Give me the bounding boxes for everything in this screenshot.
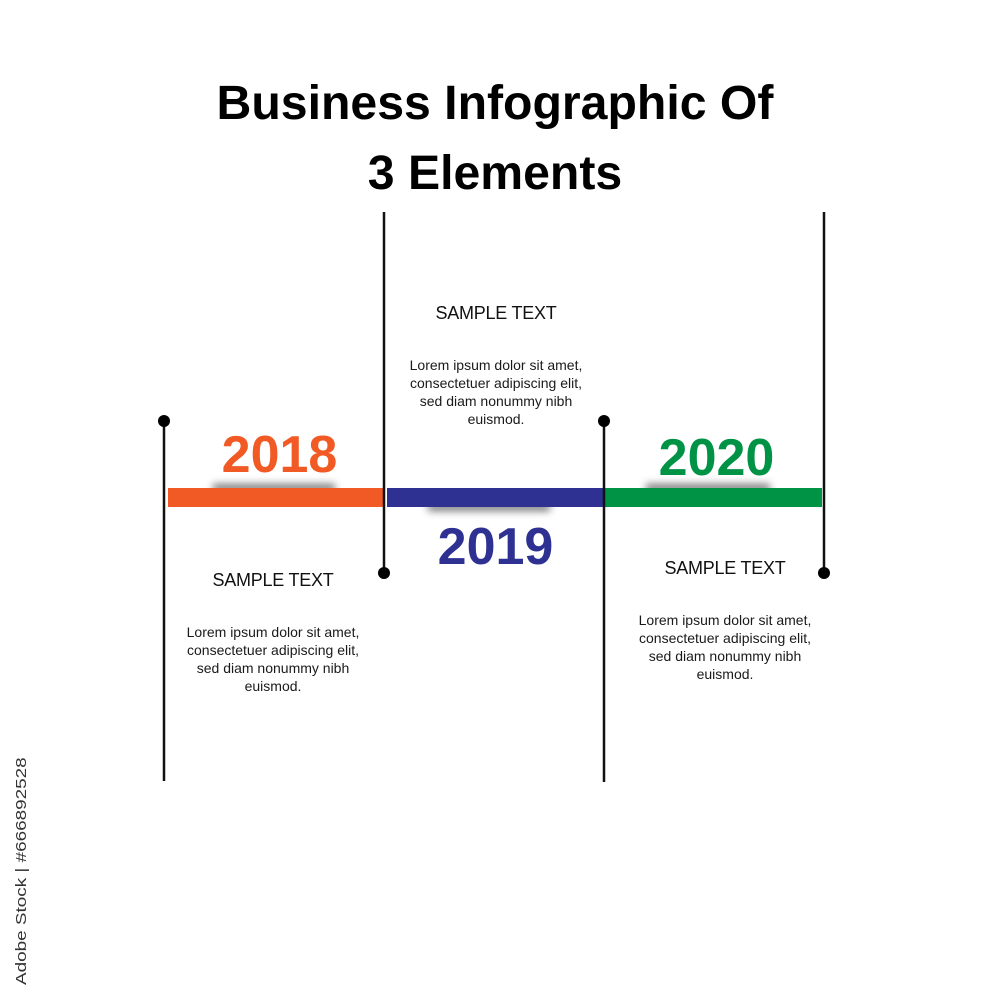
description: 2018: consectetuer adipiscing elit, [187, 642, 359, 658]
heading: 2020: SAMPLE TEXT [665, 558, 785, 578]
description: 2019: Lorem ipsum dolor sit amet, [410, 357, 582, 373]
shadow: 2019 bar [428, 503, 550, 511]
bar: 2020 [605, 488, 822, 507]
year: 2020: 2020 [659, 429, 774, 487]
description: 2018 [187, 624, 359, 694]
description: 2020: euismod. [697, 666, 753, 682]
description: 2019: sed diam nonummy nibh [420, 393, 572, 409]
description: 2019: consectetuer adipiscing elit, [410, 375, 582, 391]
timeline marker 4 [818, 212, 830, 579]
bar: 2018 [168, 488, 384, 507]
description: 2018: euismod. [245, 678, 301, 694]
shadow: 2018 bar [213, 484, 335, 492]
timeline marker 1 [158, 415, 170, 781]
heading: 2018: SAMPLE TEXT [213, 570, 333, 590]
text block: 2019 [410, 303, 582, 427]
description: 2019 [410, 357, 582, 427]
description: 2020: sed diam nonummy nibh [649, 648, 801, 664]
year: 2019: 2019 [438, 518, 553, 576]
title [217, 76, 774, 200]
shadow: 2020 bar [646, 484, 770, 492]
description: 2018: sed diam nonummy nibh [197, 660, 349, 676]
timeline marker 2 [378, 212, 390, 579]
description: 2020: consectetuer adipiscing elit, [639, 630, 811, 646]
heading: 2019: SAMPLE TEXT [436, 303, 556, 323]
description: 2020: Lorem ipsum dolor sit amet, [639, 612, 811, 628]
description: 2020 [639, 612, 811, 682]
title: 3 Elements [368, 146, 622, 200]
text block: 2018 [187, 570, 359, 694]
year: 2018: 2018 [222, 426, 337, 484]
bar: 2019 [387, 488, 605, 507]
description: 2018: Lorem ipsum dolor sit amet, [187, 624, 359, 640]
text block: 2020 [639, 558, 811, 682]
title: Business Infographic Of [217, 76, 773, 130]
side credit: Adobe Stock | #666892528 [13, 757, 30, 985]
description: 2019: euismod. [468, 411, 524, 427]
timeline marker 3 [598, 415, 610, 782]
